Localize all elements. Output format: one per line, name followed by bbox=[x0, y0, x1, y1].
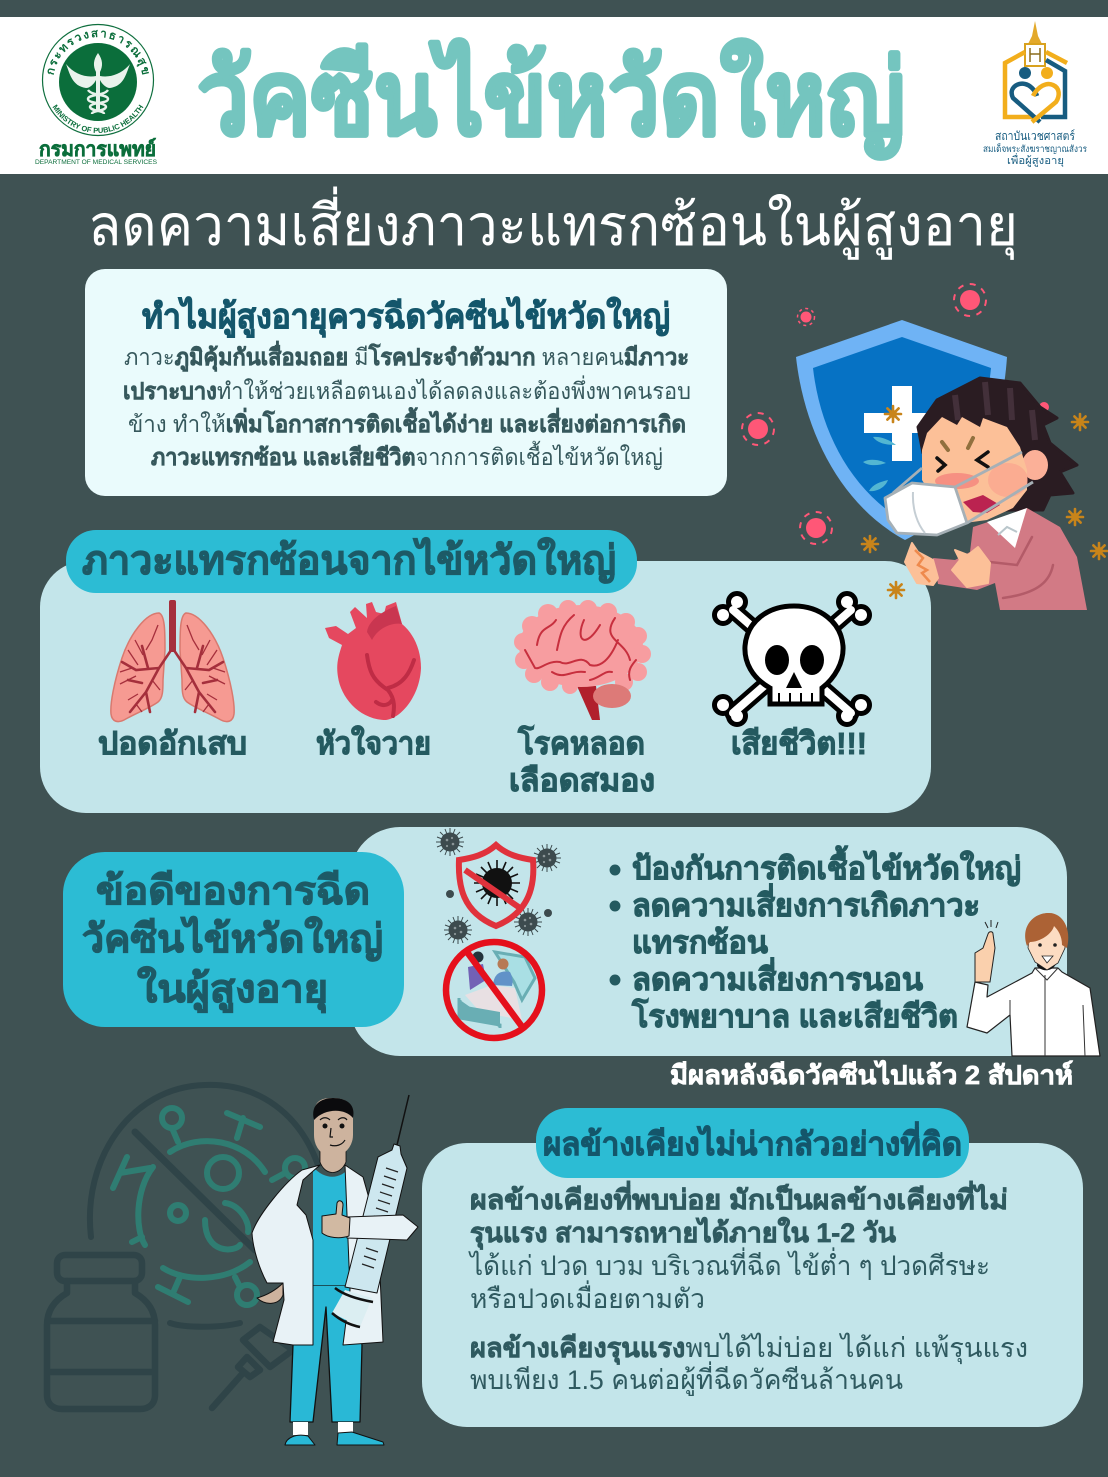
mask bbox=[885, 483, 967, 535]
list: benefits: ลดความเสี่ยงการเกิดภาวะ bbox=[632, 883, 980, 923]
heading pill: benefits: วัคซีนไข้หวัดใหญ่ bbox=[82, 916, 383, 962]
panel: why elderly should vaccinate bbox=[85, 269, 727, 496]
list: benefits bbox=[610, 845, 1021, 1034]
logo: geriatric institute: สถาบันเวชศาสตร์ bbox=[995, 129, 1075, 143]
coat: left panel bbox=[252, 1165, 320, 1345]
paragraph: why: เปราะบางทำให้ช่วยเหลือตนเองได้ลดลงและต้องพึ่งพาคนรอบ bbox=[123, 375, 691, 404]
heading pill: benefits bbox=[63, 852, 404, 1027]
text: common side effects: หรือปวดเมื่อยตามตัว bbox=[470, 1280, 705, 1314]
list: benefits: โรงพยาบาล และเสียชีวิต bbox=[631, 998, 958, 1034]
heading pill: side effects bbox=[536, 1108, 969, 1178]
scrub shirt bbox=[313, 1167, 350, 1285]
note: takes effect: มีผลหลังฉีดวัคซีนไปแล้ว 2 สัปดาห์ bbox=[670, 1059, 1073, 1090]
face bbox=[922, 417, 1027, 525]
logo: ministry of public health: กระทรวงสาธารณสุข bbox=[48, 30, 149, 75]
logo: geriatric institute: สมเด็จพระสังฆราชญาณสังวร bbox=[983, 142, 1087, 155]
icon: coughing woman bbox=[885, 378, 1087, 610]
icon: shield bbox=[796, 320, 1007, 540]
trousers bbox=[290, 1285, 362, 1422]
illustration: shield and coughing woman bbox=[742, 284, 1107, 610]
heading pill: complications bbox=[66, 530, 637, 593]
icon: brain bbox=[514, 600, 651, 720]
hand bbox=[257, 1283, 283, 1303]
logo: ministry of public health: MINISTRY OF PUBLIC HEALTH bbox=[52, 104, 144, 133]
icons: germ dots bbox=[742, 284, 1049, 544]
heading pill: side effects: ผลข้างเคียงไม่น่ากลัวอย่างที่คิด bbox=[543, 1121, 962, 1162]
icon: virus shield bbox=[436, 828, 561, 944]
labels: complications: เลือดสมอง bbox=[509, 763, 655, 798]
header band bbox=[0, 17, 1108, 174]
paragraph: why bbox=[123, 340, 691, 470]
icon: no hospital bed bbox=[446, 942, 542, 1038]
labels: complications bbox=[98, 725, 867, 798]
hands bbox=[905, 543, 938, 585]
panel: complications bbox=[40, 530, 931, 813]
logo: geriatric institute bbox=[983, 21, 1087, 167]
heading pill: benefits: ข้อดีของการฉีด bbox=[96, 870, 370, 913]
title: วัคซีนไข้หวัดใหญ่ bbox=[197, 39, 905, 160]
icon: skull and crossbones bbox=[714, 594, 870, 724]
sweater bbox=[933, 508, 1087, 610]
text: common side effects: ได้แก่ ปวด บวม บริเวณที่ฉีด ไข้ต่ำ ๆ ปวดศีรษะ bbox=[468, 1247, 990, 1281]
labels: complications: หัวใจวาย bbox=[316, 725, 431, 761]
neck and face bbox=[320, 1148, 346, 1172]
heading: why: ทำไมผู้สูงอายุควรฉีดวัคซีนไข้หวัดใหญ่ bbox=[142, 296, 670, 338]
background icons: virus, bottle and syringe bbox=[47, 1085, 318, 1409]
text: severe side effects bbox=[470, 1333, 1028, 1396]
list: benefits: ลดความเสี่ยงการนอน bbox=[632, 957, 923, 997]
labels: complications: เสียชีวิต!!! bbox=[731, 726, 867, 761]
collar bbox=[987, 508, 1027, 548]
labels: complications: ปอดอักเสบ bbox=[98, 726, 247, 761]
heading pill: benefits: ในผู้สูงอายุ bbox=[137, 966, 328, 1013]
coat: right panel bbox=[343, 1165, 383, 1345]
ear bbox=[1022, 450, 1048, 480]
labels: complications: โรคหลอด bbox=[517, 725, 645, 761]
eyes bbox=[937, 452, 988, 471]
icons: orange germs bbox=[862, 406, 1107, 598]
illustration: man pointing bbox=[967, 913, 1100, 1056]
panel: side effects bbox=[422, 1108, 1083, 1427]
arm and thumb bbox=[347, 1215, 418, 1240]
icon: lungs bbox=[111, 600, 234, 722]
subtitle: ลดความเสี่ยงภาวะแทรกซ้อนในผู้สูงอายุ bbox=[88, 186, 1018, 261]
heading pill: complications: ภาวะแทรกซ้อนจากไข้หวัดใหญ่ bbox=[82, 537, 616, 584]
shoes bbox=[293, 1422, 308, 1435]
list: benefits: ป้องกันการติดเชื้อไข้หวัดใหญ่ bbox=[632, 845, 1021, 887]
mouth bbox=[963, 495, 1000, 513]
text: severe side effects: พบเพียง 1.5 คนต่อผู้ที่ฉีดวัคซีนล้านคน bbox=[470, 1361, 903, 1396]
paragraph: why: ข้าง ทำให้เพิ่มโอกาสการติดเชื้อได้ง่าย และเสี่ยงต่อการเกิด bbox=[128, 407, 686, 437]
logo: geriatric institute: เพื่อผู้สูงอายุ bbox=[1007, 153, 1064, 167]
paragraph: why: ภาวะแทรกซ้อน และเสียชีวิตจากการติดเชื้อไข้หวัดใหญ่ bbox=[151, 441, 663, 470]
text: common side effects: ผลข้างเคียงที่พบบ่อย มักเป็นผลข้างเคียงที่ไม่ bbox=[470, 1180, 1008, 1215]
list: benefits: แทรกซ้อน bbox=[632, 925, 768, 960]
text: common side effects bbox=[468, 1180, 1008, 1314]
hair bbox=[918, 378, 1077, 510]
syringe bbox=[332, 1095, 409, 1327]
text: common side effects: รุนแรง สามารถหายได้ภายใน 1-2 วัน bbox=[470, 1217, 897, 1250]
illustration: doctor with syringe bbox=[252, 1095, 418, 1445]
panel: benefits bbox=[350, 827, 1067, 1056]
paragraph: why: ภาวะภูมิคุ้มกันเสื่อมถอย มีโรคประจำตัวมาก หลายคนมีภาวะ bbox=[124, 340, 689, 372]
icon: heart bbox=[325, 602, 421, 720]
text: severe side effects: ผลข้างเคียงรุนแรงพบได้ไม่บ่อย ได้แก่ แพ้รุนแรง bbox=[470, 1333, 1028, 1365]
logo: ministry of public health bbox=[42, 24, 154, 136]
logo text: department of medical services: DEPARTMENT OF MEDICAL SERVICES bbox=[35, 160, 157, 166]
logo text: department of medical services: กรมการแพทย์ bbox=[39, 138, 156, 161]
